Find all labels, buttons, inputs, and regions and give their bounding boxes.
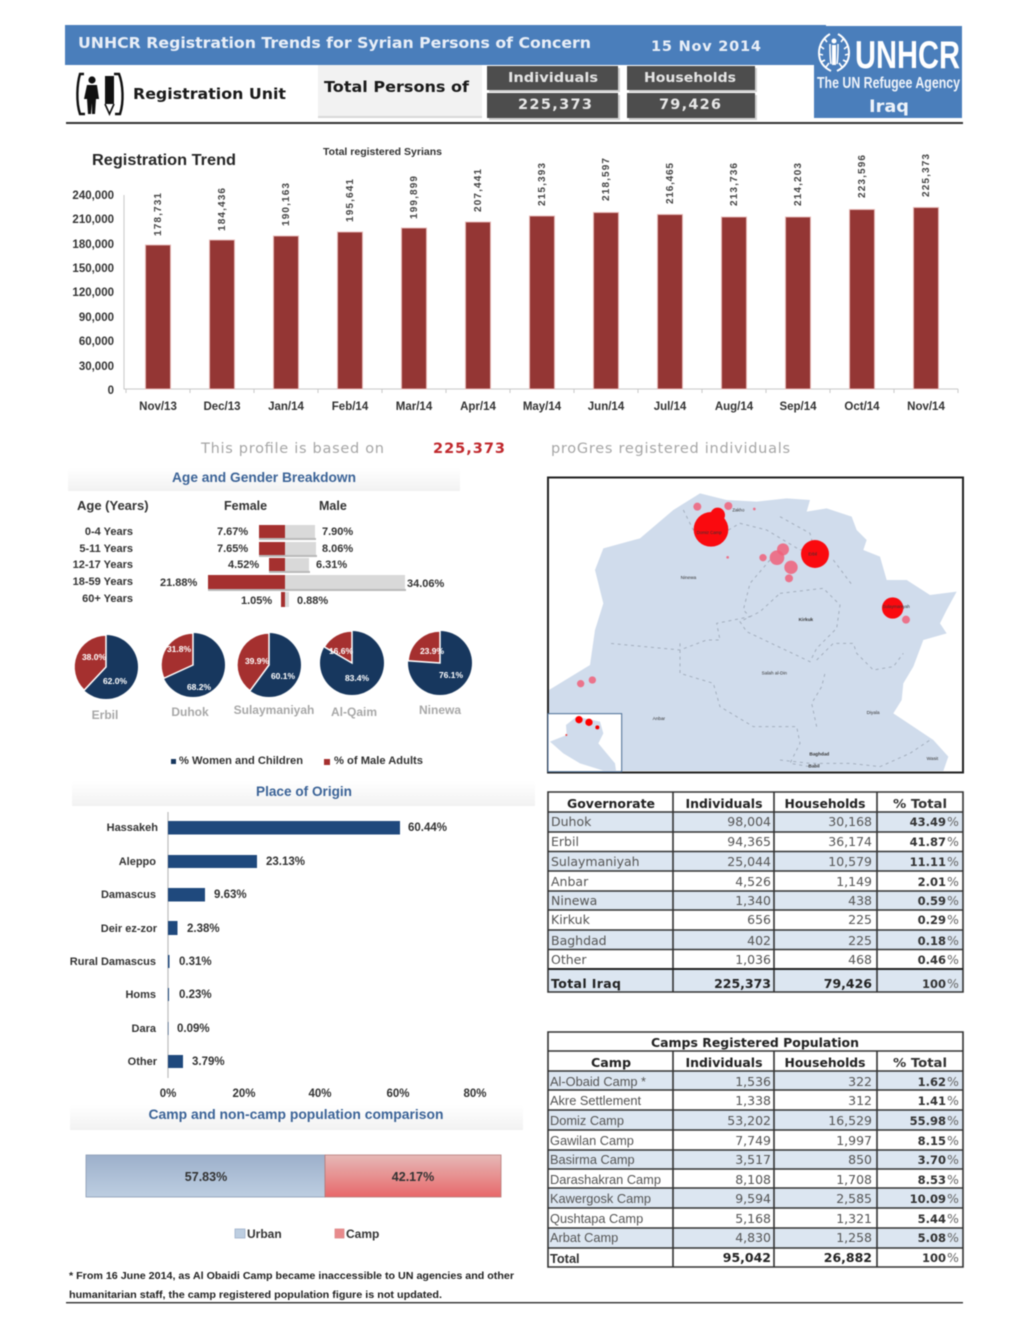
- table rows: %: [947, 1113, 959, 1128]
- y axis labels: 90,000: [79, 312, 114, 324]
- population pyramid: [73, 498, 445, 607]
- table rows: 0.59: [918, 894, 946, 908]
- table rows: %: [947, 874, 959, 889]
- population pyramid: 60+ Years: [82, 593, 133, 605]
- horizontal bar chart: Hassakeh: [107, 822, 158, 834]
- horizontal bar chart: 80%: [463, 1088, 487, 1100]
- table rows: 5,168: [735, 1211, 771, 1226]
- horizontal bar chart: 0.31%: [179, 956, 212, 968]
- bar value labels: 199,899: [409, 176, 420, 219]
- table rows: 5.44: [918, 1212, 946, 1226]
- table rows: 1,149: [836, 874, 872, 889]
- x axis labels: Sep/14: [779, 401, 817, 413]
- pie: Al-Qaim: 16.6%: [329, 646, 353, 656]
- table rows: 53,202: [727, 1113, 771, 1128]
- heading: [70, 1105, 523, 1130]
- horizontal bar chart: Other: [128, 1056, 158, 1068]
- horizontal bar chart: 0.09%: [177, 1023, 210, 1035]
- table rows: 2.01: [918, 875, 946, 889]
- table rows: %: [947, 1133, 959, 1148]
- table rows: Kawergosk Camp: [550, 1191, 651, 1206]
- table rows: %: [947, 1074, 959, 1089]
- bar value labels: 216,465: [665, 163, 676, 204]
- population pyramid: 12-17 Years: [73, 559, 133, 571]
- y axis labels: 180,000: [72, 239, 114, 251]
- table rows: Gawilan Camp: [550, 1133, 634, 1148]
- total persons stat boxes: Households: [644, 70, 736, 86]
- table rows: 100: [922, 1251, 946, 1265]
- stacked bar: [86, 1155, 501, 1197]
- table rows: [550, 1074, 959, 1266]
- map place labels: Domiz Camp: [697, 530, 722, 535]
- y axis labels: 210,000: [72, 214, 114, 226]
- pie: Erbil: 62.0%: [103, 676, 127, 686]
- bar chart: registration trend: [72, 154, 958, 413]
- map place labels: Sulaymaniyah: [883, 604, 910, 609]
- table rows: %: [947, 952, 959, 967]
- table rows: 438: [848, 893, 872, 908]
- bar value labels: 195,641: [345, 179, 356, 222]
- horizontal bar chart: 60.44%: [408, 822, 447, 834]
- table header: Individuals: [686, 797, 762, 811]
- table rows: 2,585: [836, 1191, 872, 1206]
- x axis labels: Mar/14: [396, 401, 433, 413]
- horizontal bar chart: 2.38%: [187, 923, 220, 935]
- table rows: 79,426: [824, 976, 872, 991]
- profile basis statement: 225,373: [433, 441, 505, 457]
- map panel: [548, 478, 963, 772]
- table rows: 7,749: [735, 1133, 771, 1148]
- registration trend heading: Registration Trend: [92, 152, 236, 169]
- table rows: 3,517: [735, 1152, 771, 1167]
- pie: Duhok: 31.8%: [167, 644, 191, 654]
- table rows: 8.15: [918, 1134, 946, 1148]
- table header: [591, 1056, 947, 1070]
- population pyramid: 34.06%: [407, 578, 445, 590]
- table rows: %: [947, 912, 959, 927]
- table rows: 1,536: [735, 1074, 771, 1089]
- bars: [146, 208, 938, 389]
- map place labels: Salah al-Din: [762, 670, 787, 675]
- chart title: Total registered Syrians: [323, 146, 442, 158]
- x axis labels: [139, 401, 945, 413]
- table rows: 98,004: [727, 814, 771, 829]
- bar value labels: 214,203: [793, 163, 804, 206]
- horizontal bar chart: Aleppo: [119, 856, 156, 868]
- table header: % Total: [893, 1056, 947, 1070]
- x axis labels: Dec/13: [203, 401, 241, 413]
- table rows: 1.41: [918, 1094, 946, 1108]
- table rows: 100: [922, 977, 946, 991]
- table header: Households: [784, 1056, 866, 1070]
- x axis labels: Oct/14: [844, 401, 880, 413]
- registration unit label: Registration Unit: [133, 85, 286, 103]
- pie: Al-Qaim: Al-Qaim: [331, 705, 377, 719]
- population pyramid: 5-11 Years: [79, 543, 133, 555]
- legend: [235, 1227, 379, 1241]
- pie: Duhok: Duhok: [171, 705, 209, 719]
- population pyramid: 18-59 Years: [73, 576, 133, 588]
- icon: registration unit people: [77, 74, 123, 114]
- y axis labels: 150,000: [72, 263, 114, 275]
- table rows: Basirma Camp: [550, 1152, 635, 1167]
- x axis labels: May/14: [523, 401, 562, 413]
- table rows: Duhok: [551, 814, 592, 829]
- UNHCR logo: [814, 26, 962, 118]
- legend: Urban: [247, 1227, 282, 1241]
- table rows: 41.87: [910, 835, 946, 849]
- table rows: %: [947, 1191, 959, 1206]
- pie: Erbil: Erbil: [92, 708, 118, 722]
- table rows: Total Iraq: [551, 976, 621, 991]
- bar value labels: 223,596: [857, 155, 868, 198]
- total persons stat boxes: Individuals: [508, 70, 598, 86]
- map place labels: Baghdad: [809, 752, 829, 757]
- table rows: 4,526: [735, 874, 771, 889]
- pie: Erbil: [74, 635, 138, 722]
- table rows: 1,997: [836, 1133, 872, 1148]
- report date: 15 Nov 2014: [651, 39, 761, 55]
- table rows: Kirkuk: [551, 912, 591, 927]
- pie: Al-Qaim: 83.4%: [345, 673, 369, 683]
- x axis labels: Nov/14: [907, 401, 945, 413]
- horizontal bar chart: 40%: [308, 1088, 332, 1100]
- total persons label box: Total Persons of: [324, 78, 469, 96]
- panel: camp and non-camp comparison: [70, 1105, 523, 1241]
- table rows: 8.53: [918, 1173, 946, 1187]
- pie: Erbil: 38.0%: [82, 652, 106, 662]
- table rows: %: [947, 976, 959, 991]
- population pyramid: 7.90%: [322, 526, 353, 538]
- total persons stat boxes: 225,373: [518, 97, 592, 113]
- bar value labels: 184,436: [217, 188, 228, 231]
- horizontal bar chart: Deir ez-zor: [101, 923, 158, 935]
- table rows: 3.70: [918, 1153, 946, 1167]
- table rows: 95,042: [723, 1250, 771, 1265]
- table header: Individuals: [686, 1056, 762, 1070]
- bar value labels: 207,441: [473, 169, 484, 212]
- footnote: [69, 1270, 514, 1301]
- heading: Place of Origin: [256, 783, 352, 799]
- pie: Sulaymaniyah: 60.1%: [271, 671, 295, 681]
- table rows: Darashakran Camp: [550, 1172, 661, 1187]
- table rows: 10.09: [910, 1192, 946, 1206]
- map place labels: Anbar: [653, 716, 666, 721]
- icon: UNHCR emblem: [819, 34, 849, 71]
- map place labels: Ninewa: [681, 575, 697, 580]
- table header: [567, 797, 947, 811]
- total persons stat boxes: 79,426: [659, 97, 721, 113]
- x axis labels: Aug/14: [715, 401, 754, 413]
- table rows: 11.11: [910, 855, 946, 869]
- total persons stat boxes: [487, 66, 757, 120]
- horizontal bar chart: Rural Damascus: [70, 956, 156, 968]
- pie: Sulaymaniyah: [234, 633, 314, 717]
- table header: Governorate: [567, 797, 655, 811]
- x axis labels: Feb/14: [332, 401, 369, 413]
- table rows: 1,708: [836, 1172, 872, 1187]
- table rows: 9,594: [735, 1191, 771, 1206]
- population pyramid: 21.88%: [160, 577, 198, 589]
- bar value labels: 178,731: [153, 193, 164, 236]
- table rows: 94,365: [727, 834, 771, 849]
- table rows: Baghdad: [551, 933, 607, 948]
- population pyramid: 6.31%: [316, 559, 347, 571]
- table: camps registered population: [548, 1032, 963, 1267]
- y axis labels: 120,000: [72, 287, 114, 299]
- x axis labels: Apr/14: [460, 401, 496, 413]
- table rows: 55.98: [910, 1114, 946, 1128]
- table rows: 26,882: [824, 1250, 872, 1265]
- table rows: Arbat Camp: [550, 1230, 618, 1245]
- table rows: 468: [848, 952, 872, 967]
- table rows: Al-Obaid Camp *: [550, 1074, 646, 1089]
- map land area: [549, 493, 957, 771]
- table rows: 312: [848, 1093, 872, 1108]
- pie: Duhok: 68.2%: [187, 682, 211, 692]
- table rows: 0.29: [918, 913, 946, 927]
- legend: Camp: [346, 1227, 379, 1241]
- table rows: 402: [747, 933, 771, 948]
- map place labels: Erbil: [808, 551, 817, 556]
- table rows: %: [947, 1211, 959, 1226]
- map place labels: Babil: [808, 763, 820, 768]
- population pyramid: Age (Years): [77, 498, 149, 513]
- pie: Al-Qaim: [320, 631, 384, 719]
- table rows: 10,579: [828, 854, 872, 869]
- heading: Age and Gender Breakdown: [172, 469, 356, 485]
- table rows: 4,830: [735, 1230, 771, 1245]
- map place labels: [653, 508, 939, 768]
- table rows: [551, 814, 959, 991]
- table rows: 5.08: [918, 1231, 946, 1245]
- pie: Ninewa: 76.1%: [439, 670, 463, 680]
- table: governorates: [548, 792, 963, 992]
- map location bubbles: pale: [577, 502, 910, 687]
- population pyramid: 7.65%: [217, 543, 248, 555]
- table header: Households: [784, 797, 866, 811]
- population pyramid: 0-4 Years: [85, 526, 133, 538]
- y axis labels: 240,000: [72, 190, 114, 202]
- logo tagline: The UN Refugee Agency: [817, 75, 960, 92]
- bar value labels: [153, 154, 932, 236]
- pie: Sulaymaniyah: 39.9%: [245, 656, 269, 666]
- table rows: Total: [550, 1251, 580, 1266]
- population pyramid: 1.05%: [241, 595, 272, 607]
- table rows: 322: [848, 1074, 872, 1089]
- profile basis statement: proGres registered individuals: [551, 441, 790, 457]
- map place labels: Kirkuk: [799, 617, 814, 622]
- pie: Sulaymaniyah: Sulaymaniyah: [234, 703, 314, 717]
- table rows: 25,044: [727, 854, 771, 869]
- table rows: 225,373: [714, 976, 771, 991]
- population pyramid: 4.52%: [228, 559, 259, 571]
- table header: % Total: [893, 797, 947, 811]
- table rows: Qushtapa Camp: [550, 1211, 643, 1226]
- map location bubbles: large: [694, 508, 903, 619]
- y axis labels: 0: [108, 385, 114, 397]
- table title: Camps Registered Population: [651, 1036, 859, 1050]
- table rows: %: [947, 854, 959, 869]
- x axis labels: Jun/14: [588, 401, 625, 413]
- table rows: %: [947, 893, 959, 908]
- table rows: Sulaymaniyah: [551, 854, 640, 869]
- header banner: [65, 25, 826, 65]
- footnote: humanitarian staff, the camp registered population figure is not updated.: [69, 1289, 442, 1301]
- horizontal bar chart: Damascus: [101, 889, 156, 901]
- x axis labels: Jan/14: [268, 401, 305, 413]
- heading: [72, 781, 535, 806]
- table rows: %: [947, 814, 959, 829]
- table rows: 656: [747, 912, 771, 927]
- bar value labels: 218,597: [601, 158, 612, 201]
- pie legend: % Women and Children: [179, 755, 303, 767]
- population pyramid: 8.06%: [322, 543, 353, 555]
- pie: Ninewa: [408, 631, 472, 717]
- table rows: 225: [848, 912, 872, 927]
- table rows: Ninewa: [551, 893, 597, 908]
- x axis labels: Jul/14: [654, 401, 687, 413]
- bar value labels: 190,163: [281, 183, 292, 226]
- table rows: 16,529: [828, 1113, 872, 1128]
- panel: age and gender breakdown: [68, 468, 472, 767]
- bar value labels: 215,393: [537, 163, 548, 206]
- table rows: 0.46: [918, 953, 946, 967]
- map inset: Iraq locator: [548, 714, 622, 772]
- panel: place of origin: [70, 781, 535, 1100]
- pie: Duhok: [161, 633, 225, 719]
- table rows: 1,258: [836, 1230, 872, 1245]
- table rows: %: [947, 933, 959, 948]
- horizontal bar chart: Dara: [132, 1023, 157, 1035]
- table rows: 30,168: [828, 814, 872, 829]
- y axis labels: [72, 190, 114, 397]
- table rows: Anbar: [551, 874, 589, 889]
- map place labels: Wasit: [927, 756, 939, 761]
- total persons label box: [318, 65, 482, 118]
- heading: [68, 468, 460, 491]
- pie legend: % of Male Adults: [334, 755, 423, 767]
- title: UNHCR Registration Trends for Syrian Persons of Concern: [78, 34, 591, 52]
- x axis labels: Nov/13: [139, 401, 177, 413]
- pie legend: [171, 755, 423, 767]
- horizontal bar chart: 20%: [232, 1088, 256, 1100]
- table rows: Domiz Camp: [550, 1113, 624, 1128]
- heading: Camp and non-camp population comparison: [148, 1106, 444, 1122]
- table rows: 225: [848, 933, 872, 948]
- logo wordmark: UNHCR: [855, 34, 960, 77]
- table rows: 1,036: [735, 952, 771, 967]
- horizontal bar chart: 0.23%: [179, 989, 212, 1001]
- table rows: 1.62: [918, 1075, 946, 1089]
- table rows: %: [947, 1250, 959, 1265]
- table rows: %: [947, 1172, 959, 1187]
- profile basis statement: This profile is based on: [200, 441, 384, 457]
- horizontal bar chart: 60%: [386, 1088, 410, 1100]
- horizontal bar chart: 23.13%: [266, 856, 305, 868]
- table rows: 1,338: [735, 1093, 771, 1108]
- pie: Ninewa: 23.9%: [420, 646, 444, 656]
- horizontal bar chart: Homs: [125, 989, 156, 1001]
- horizontal bar chart: 3.79%: [192, 1056, 225, 1068]
- table rows: %: [947, 834, 959, 849]
- country name: Iraq: [869, 97, 909, 116]
- profile basis statement: [200, 441, 790, 457]
- horizontal bar chart: [70, 812, 487, 1100]
- table rows: 850: [848, 1152, 872, 1167]
- table rows: 8,108: [735, 1172, 771, 1187]
- bar value labels: 213,736: [729, 163, 740, 206]
- map place labels: Diyala: [867, 710, 880, 715]
- footnote: * From 16 June 2014, as Al Obaidi Camp became inaccessible to UN agencies and other: [69, 1270, 514, 1282]
- table rows: 36,174: [828, 834, 872, 849]
- table rows: %: [947, 1230, 959, 1245]
- population pyramid: Female: [224, 499, 267, 513]
- horizontal bar chart: 9.63%: [214, 889, 247, 901]
- stacked bar: 57.83%: [185, 1170, 227, 1184]
- table rows: 43.49: [910, 815, 946, 829]
- pie: Ninewa: Ninewa: [419, 703, 461, 717]
- table rows: %: [947, 1152, 959, 1167]
- table rows: %: [947, 1093, 959, 1108]
- map place labels: Zakho: [732, 508, 745, 513]
- table rows: 1,321: [836, 1211, 872, 1226]
- bar value labels: 225,373: [921, 154, 932, 197]
- population pyramid: Male: [319, 499, 347, 513]
- y axis labels: 60,000: [79, 336, 114, 348]
- population pyramid: 0.88%: [297, 595, 328, 607]
- table rows: Akre Settlement: [550, 1093, 641, 1108]
- horizontal bar chart: 0%: [160, 1088, 176, 1100]
- table rows: Other: [551, 952, 587, 967]
- table rows: 1,340: [735, 893, 771, 908]
- population pyramid: 7.67%: [217, 526, 248, 538]
- table rows: Erbil: [551, 834, 579, 849]
- table header: Camp: [591, 1056, 631, 1070]
- table rows: 0.18: [918, 934, 946, 948]
- y axis labels: 30,000: [79, 361, 114, 373]
- stacked bar: 42.17%: [392, 1170, 434, 1184]
